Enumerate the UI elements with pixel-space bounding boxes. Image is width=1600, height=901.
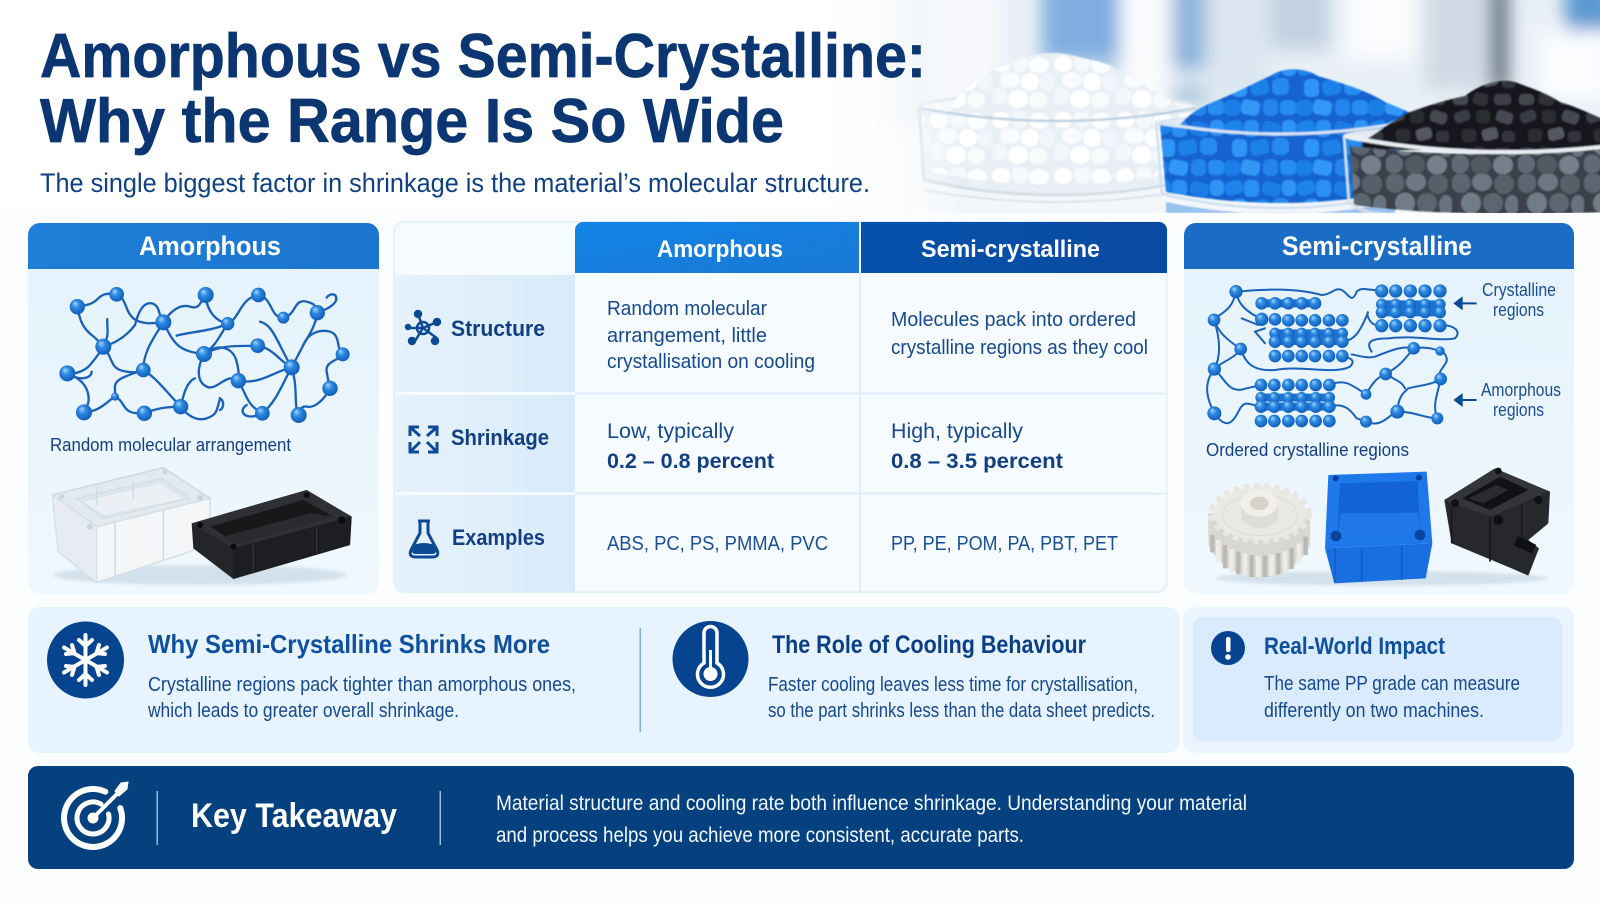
icon: snowflake: [47, 622, 124, 698]
amorphous structure text: crystallisation on cooling: [607, 350, 815, 373]
amorphous shrinkage values: [607, 420, 774, 473]
body text: differently on two machines.: [1264, 700, 1484, 722]
semi-crystalline structure text: [891, 308, 1148, 359]
panel: comparison table: [394, 222, 1167, 592]
body text: so the part shrinks less than the data sheet predicts.: [768, 700, 1155, 722]
label: amorphous regions: Amorphous: [1481, 380, 1561, 400]
arrow: to amorphous regions: [1455, 395, 1477, 405]
row: shrinkage: [410, 420, 1063, 473]
product photo: gear, blue box, black part: [1208, 468, 1550, 586]
body text: [1264, 673, 1520, 722]
icon: flask: [410, 521, 438, 557]
panel: real-world impact: [1183, 607, 1574, 753]
heading: key takeaway: Key Takeaway: [191, 797, 397, 835]
amorphous structure text: arrangement, little: [607, 324, 767, 347]
body text: [768, 674, 1155, 722]
amorphous structure text: [607, 297, 815, 373]
section: the role of cooling behaviour: [672, 621, 1155, 722]
body text: The same PP grade can measure: [1264, 673, 1520, 695]
panel: semi-crystalline: [1184, 223, 1574, 594]
section: why semi-crystalline shrinks more: [47, 622, 576, 722]
icon: target with arrow: [64, 782, 128, 847]
semi-crystalline shrinkage values: High, typically: [891, 420, 1023, 443]
icon: shrink arrows: [410, 427, 437, 452]
title: Amorphous vs Semi-Crystalline:: [40, 22, 926, 91]
heading: real-world impact: Real-World Impact: [1264, 633, 1445, 660]
product photo: clear and black enclosures: [52, 468, 352, 585]
semi-crystalline examples: PP, PE, POM, PA, PBT, PET: [891, 533, 1118, 555]
caption: ordered crystalline regions: Ordered crystalline regions: [1206, 439, 1409, 460]
diagram: ordered crystalline and amorphous regions: [1207, 284, 1477, 428]
panel: why semi-crystalline shrinks and cooling behaviour: [28, 607, 1180, 753]
semi-crystalline structure text: Molecules pack into ordered: [891, 308, 1136, 331]
black pellet jar: [1344, 81, 1600, 214]
icon: molecule: [406, 311, 440, 344]
row: examples: [410, 521, 1118, 557]
table header: semi-crystalline: [861, 222, 1167, 273]
body text: Faster cooling leaves less time for crystallisation,: [768, 674, 1138, 696]
hero photo: plastic pellets in glass jars: [896, 0, 1600, 213]
label: crystalline regions: regions: [1493, 300, 1544, 320]
amorphous shrinkage values: Low, typically: [607, 420, 735, 443]
takeaway message: Material structure and cooling rate both influence shrinkage. Understanding your material: [496, 792, 1247, 815]
label: examples: Examples: [452, 525, 545, 550]
label: shrinkage: Shrinkage: [451, 425, 549, 450]
title: [40, 22, 926, 156]
table header: semi-crystalline: Semi-crystalline: [921, 236, 1100, 263]
banner: key takeaway: [28, 766, 1574, 869]
heading: why semi-crystalline shrinks more: Why Semi-Crystalline Shrinks More: [148, 629, 550, 659]
label: amorphous regions: regions: [1493, 400, 1544, 420]
takeaway message: and process helps you achieve more consistent, accurate parts.: [496, 824, 1024, 847]
white pellet jar: [918, 53, 1196, 202]
body text: [147, 674, 576, 722]
takeaway message: [496, 792, 1247, 847]
amorphous panel header: Amorphous: [139, 231, 281, 261]
row label column background: [394, 275, 575, 592]
amorphous examples: ABS, PC, PS, PMMA, PVC: [607, 533, 828, 555]
label: crystalline regions: Crystalline: [1482, 280, 1556, 300]
heading: the role of cooling behaviour: The Role of Cooling Behaviour: [772, 631, 1086, 659]
semi-crystalline panel header: [1184, 223, 1574, 269]
icon: thermometer: [672, 621, 748, 697]
diagram: random molecular network: [59, 287, 350, 423]
blue pellet jar: [1156, 69, 1412, 214]
table header: amorphous: Amorphous: [657, 236, 783, 263]
amorphous panel header: [28, 223, 379, 269]
row: structure: [406, 297, 1148, 373]
caption: random molecular arrangement: Random molecular arrangement: [50, 435, 291, 455]
label: amorphous regions: [1481, 380, 1561, 420]
title: Why the Range Is So Wide: [40, 87, 784, 156]
table header: amorphous: [575, 222, 859, 273]
arrow: to crystalline regions: [1455, 298, 1477, 308]
amorphous shrinkage values: 0.2 – 0.8 percent: [607, 450, 774, 473]
semi-crystalline shrinkage values: [891, 420, 1063, 473]
subtitle: The single biggest factor in shrinkage is the material’s molecular structure.: [40, 168, 870, 198]
body text: Crystalline regions pack tighter than amorphous ones,: [148, 674, 576, 696]
semi-crystalline structure text: crystalline regions as they cool: [891, 336, 1148, 359]
panel: amorphous: [28, 223, 379, 594]
body text: which leads to greater overall shrinkage.: [147, 700, 459, 722]
semi-crystalline panel header: Semi-crystalline: [1282, 231, 1472, 261]
semi-crystalline shrinkage values: 0.8 – 3.5 percent: [891, 450, 1063, 473]
label: crystalline regions: [1482, 280, 1556, 320]
label: structure: Structure: [451, 316, 545, 341]
icon: exclamation: [1211, 631, 1245, 665]
amorphous structure text: Random molecular: [607, 297, 767, 320]
